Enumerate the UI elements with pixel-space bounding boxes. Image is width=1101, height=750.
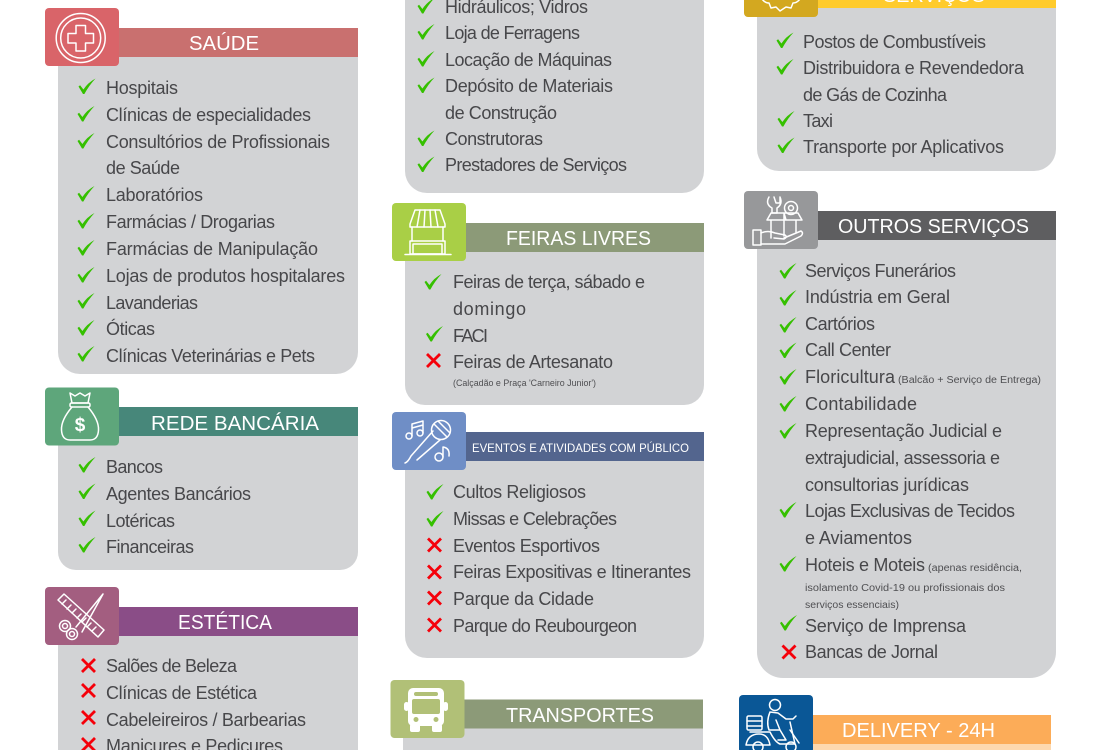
icon: medical cross — [45, 8, 119, 66]
list: saúde items: Laboratórios — [106, 185, 203, 205]
heading: outros serviços: OUTROS SERVIÇOS — [838, 216, 1029, 238]
list: saúde items: Hospitais — [106, 78, 178, 98]
list: estética items: Clínicas de Estética — [106, 683, 258, 703]
list: saúde items: de Saúde — [106, 158, 180, 178]
panel: serviços — [744, 0, 1056, 171]
heading: saúde: SAÚDE — [189, 32, 259, 55]
list: saúde items: Clínicas de especialidades — [106, 105, 311, 125]
panel: estética — [45, 587, 358, 750]
icon: market stall — [392, 203, 466, 261]
list: rede bancária items: Financeiras — [106, 537, 194, 557]
icon: gear — [744, 0, 818, 17]
list: eventos items: Feiras Expositivas e Itinerantes — [453, 562, 691, 582]
list: serviços items — [776, 32, 1025, 157]
list: feiras items: Feiras de terça, sábado e — [453, 272, 645, 292]
list: serviços items: Taxi — [803, 111, 833, 131]
list: eventos items — [426, 482, 691, 636]
icon: money bag — [45, 388, 119, 446]
list: comércio items: Construtoras — [445, 129, 543, 149]
list: serviços items: de Gás de Cozinha — [803, 85, 948, 105]
icon: delivery scooter — [739, 695, 813, 750]
icon: hand with box and tools — [744, 191, 818, 249]
list: feiras items — [424, 272, 645, 388]
list: outros serviços items: Serviço de Imprensa — [805, 616, 967, 636]
list: outros serviços items: e Aviamentos — [805, 528, 912, 548]
list: rede bancária items: Lotéricas — [106, 511, 175, 531]
list: comércio items: Depósito de Materiais — [445, 76, 613, 96]
list: saúde items: Óticas — [106, 318, 155, 339]
list: eventos items: Parque do Reubourgeon — [453, 616, 637, 636]
list: eventos items: Eventos Esportivos — [453, 536, 600, 556]
list: saúde items: Consultórios de Profissionais — [106, 132, 330, 152]
list: outros serviços items: Hoteis e Moteis — [805, 555, 925, 575]
list: outros serviços items: serviços essenciais) — [805, 600, 899, 611]
panel: saúde — [45, 8, 358, 374]
list: outros serviços items: Lojas Exclusivas de Tecidos — [805, 501, 1015, 521]
list: saúde items: Lojas de produtos hospitalares — [106, 266, 345, 286]
list: outros serviços items: Representação Judicial e — [805, 421, 1002, 441]
list: comércio items: Prestadores de Serviços — [445, 155, 627, 175]
list: feiras items: domingo — [453, 299, 526, 319]
heading: eventos e atividades com público: EVENTOS E ATIVIDADES COM PÚBLICO — [472, 442, 689, 455]
list: outros serviços items: (Balcão + Serviço de Entrega) — [898, 375, 1041, 386]
heading: delivery 24h: DELIVERY - 24H — [842, 720, 995, 742]
list: outros serviços items: (apenas residência, — [928, 563, 1022, 574]
panel: delivery 24h — [739, 695, 1051, 750]
list: rede bancária items: Agentes Bancários — [106, 484, 251, 504]
list: outros serviços items: extrajudicial, assessoria e — [805, 448, 1000, 468]
list: saúde items: Clínicas Veterinárias e Pets — [106, 346, 315, 366]
list: estética items: Cabeleireiros / Barbearias — [106, 710, 306, 730]
list: eventos items: Missas e Celebrações — [453, 509, 617, 529]
list: serviços items: Distribuidora e Revendedora — [803, 58, 1025, 78]
list: comércio items — [418, 0, 627, 175]
list: serviços items: Postos de Combustíveis — [803, 32, 986, 52]
list: feiras items: Feiras de Artesanato — [453, 352, 613, 372]
icon: money bag: $ — [75, 415, 86, 436]
panel: comércio e construção — [405, 0, 704, 193]
heading: rede bancária: REDE BANCÁRIA — [151, 412, 320, 435]
list: feiras items: (Calçadão e Praça 'Carneiro Junior') — [453, 378, 596, 388]
list: rede bancária items: Bancos — [106, 457, 163, 477]
list: outros serviços items: Bancas de Jornal — [805, 642, 938, 662]
panel: outros serviços — [744, 191, 1056, 678]
list: comércio items: Loja de Ferragens — [445, 23, 580, 43]
list: outros serviços items: Contabilidade — [805, 394, 917, 414]
list: estética items: Salões de Beleza — [106, 656, 238, 676]
panel: feiras livres — [392, 203, 704, 405]
list: comércio items: de Construção — [445, 103, 557, 123]
panel: transportes — [390, 680, 703, 750]
heading: estética: ESTÉTICA — [178, 611, 273, 634]
list: outros serviços items: Call Center — [805, 340, 891, 360]
icon: comb and scissors — [45, 587, 119, 645]
list: outros serviços items: Indústria em Geral — [805, 287, 950, 307]
panel: rede bancária — [45, 388, 358, 570]
icon: microphone and notes — [392, 412, 466, 470]
list: outros serviços items: Cartórios — [805, 314, 875, 334]
list: rede bancária items — [78, 457, 251, 557]
list: outros serviços items: isolamento Covid-19 ou profissionais dos — [805, 583, 1005, 594]
heading: transportes: TRANSPORTES — [506, 705, 654, 727]
list: eventos items: Parque da Cidade — [453, 589, 594, 609]
list: outros serviços items — [780, 261, 1041, 662]
list: outros serviços items: Serviços Funerários — [805, 261, 956, 281]
list: serviços items: Transporte por Aplicativos — [803, 137, 1004, 157]
list: estética items — [82, 656, 306, 750]
icon: bus — [390, 680, 464, 738]
heading: feiras livres: FEIRAS LIVRES — [506, 228, 651, 250]
list: feiras items: FACI — [453, 326, 488, 346]
panel: eventos e atividades — [392, 412, 704, 658]
list: comércio items: Locação de Máquinas — [445, 50, 612, 70]
list: eventos items: Cultos Religiosos — [453, 482, 586, 502]
list: saúde items: Farmácias de Manipulação — [106, 239, 318, 259]
list: saúde items: Farmácias / Drogarias — [106, 212, 275, 232]
list: outros serviços items: Floricultura — [805, 367, 896, 387]
list: saúde items — [78, 78, 345, 366]
list: saúde items: Lavanderias — [106, 293, 198, 313]
list: outros serviços items: consultorias jurídicas — [805, 475, 969, 495]
